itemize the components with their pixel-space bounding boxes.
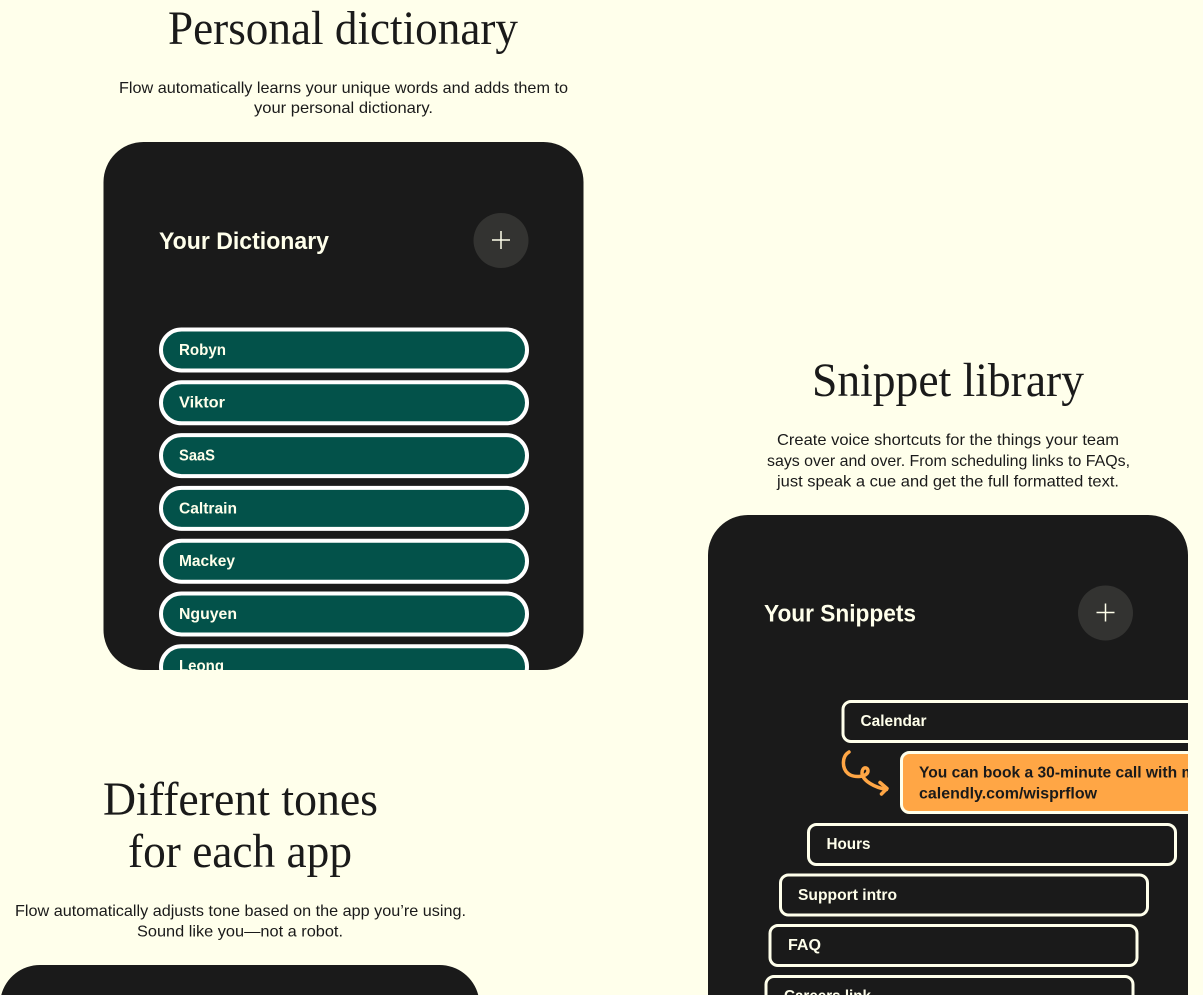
word pill: Caltrain: Caltrain <box>179 500 237 518</box>
snippet row: Support intro <box>780 875 1148 915</box>
icon: curved arrow <box>843 752 887 794</box>
snippet expansion callout <box>902 752 1203 812</box>
word pill: Viktor <box>161 382 527 423</box>
snippet expansion callout: calendly.com/wisprflow <box>919 786 1098 802</box>
snippet row: Calendar <box>843 702 1203 742</box>
snippet row: Calendar: Calendar <box>860 713 926 730</box>
panel: tones app panel <box>1 965 478 995</box>
heading: Different tones for each app: Different tones <box>103 773 378 826</box>
word pill: Nguyen: Nguyen <box>179 606 237 623</box>
word pill: SaaS: SaaS <box>179 448 215 464</box>
icon: add word button <box>474 213 528 268</box>
heading: Different tones for each app: for each app <box>128 825 352 878</box>
heading: Snippet library: Snippet library <box>812 354 1084 407</box>
snippet row: FAQ: FAQ <box>788 937 821 954</box>
word pill: Leong <box>159 644 529 670</box>
text block: snippet description: Create voice shortcuts for the things your team <box>777 432 1119 449</box>
word pill: Robyn <box>161 330 527 370</box>
word pill: Viktor: Viktor <box>179 394 225 412</box>
panel heading: Your Snippets: Your Snippets <box>764 600 916 628</box>
text block: dictionary description <box>119 80 568 117</box>
text block: snippet description: says over and over. From scheduling links to FAQs, <box>767 453 1130 470</box>
word pill: Nguyen <box>161 594 527 634</box>
word pill: SaaS <box>161 435 527 476</box>
text block: dictionary description: your personal dictionary. <box>254 100 433 117</box>
snippet expansion callout: You can book a 30-minute call with me <box>919 764 1203 782</box>
word pill: Mackey: Mackey <box>179 553 235 570</box>
panel: your snippets <box>708 515 1203 995</box>
snippet row: Careers link <box>766 976 1133 995</box>
snippet row: Support intro: Support intro <box>798 887 897 904</box>
snippet row: FAQ <box>770 926 1137 966</box>
word pill: Caltrain <box>161 488 527 529</box>
heading: Different tones for each app <box>103 773 378 878</box>
text block: tones description: Flow automatically adjusts tone based on the app you’re using. <box>15 903 466 920</box>
icon: add snippet button <box>1078 586 1133 640</box>
word pill: Leong: Leong <box>179 658 224 675</box>
text block: snippet description: just speak a cue and get the full formatted text. <box>776 474 1119 490</box>
text block: snippet description <box>767 432 1130 490</box>
word pill: Robyn: Robyn <box>179 342 226 359</box>
panel: your dictionary <box>104 142 584 687</box>
panel heading: Your Dictionary: Your Dictionary <box>159 228 330 255</box>
text block: dictionary description: Flow automatically learns your unique words and adds them to <box>119 80 568 97</box>
snippet row: Hours: Hours <box>826 836 871 853</box>
text block: tones description <box>15 903 466 940</box>
heading: Personal dictionary: Personal dictionary <box>168 2 518 55</box>
snippet row: Hours <box>808 824 1176 864</box>
word pill: Mackey <box>161 541 527 582</box>
text block: tones description: Sound like you—not a robot. <box>137 924 343 940</box>
